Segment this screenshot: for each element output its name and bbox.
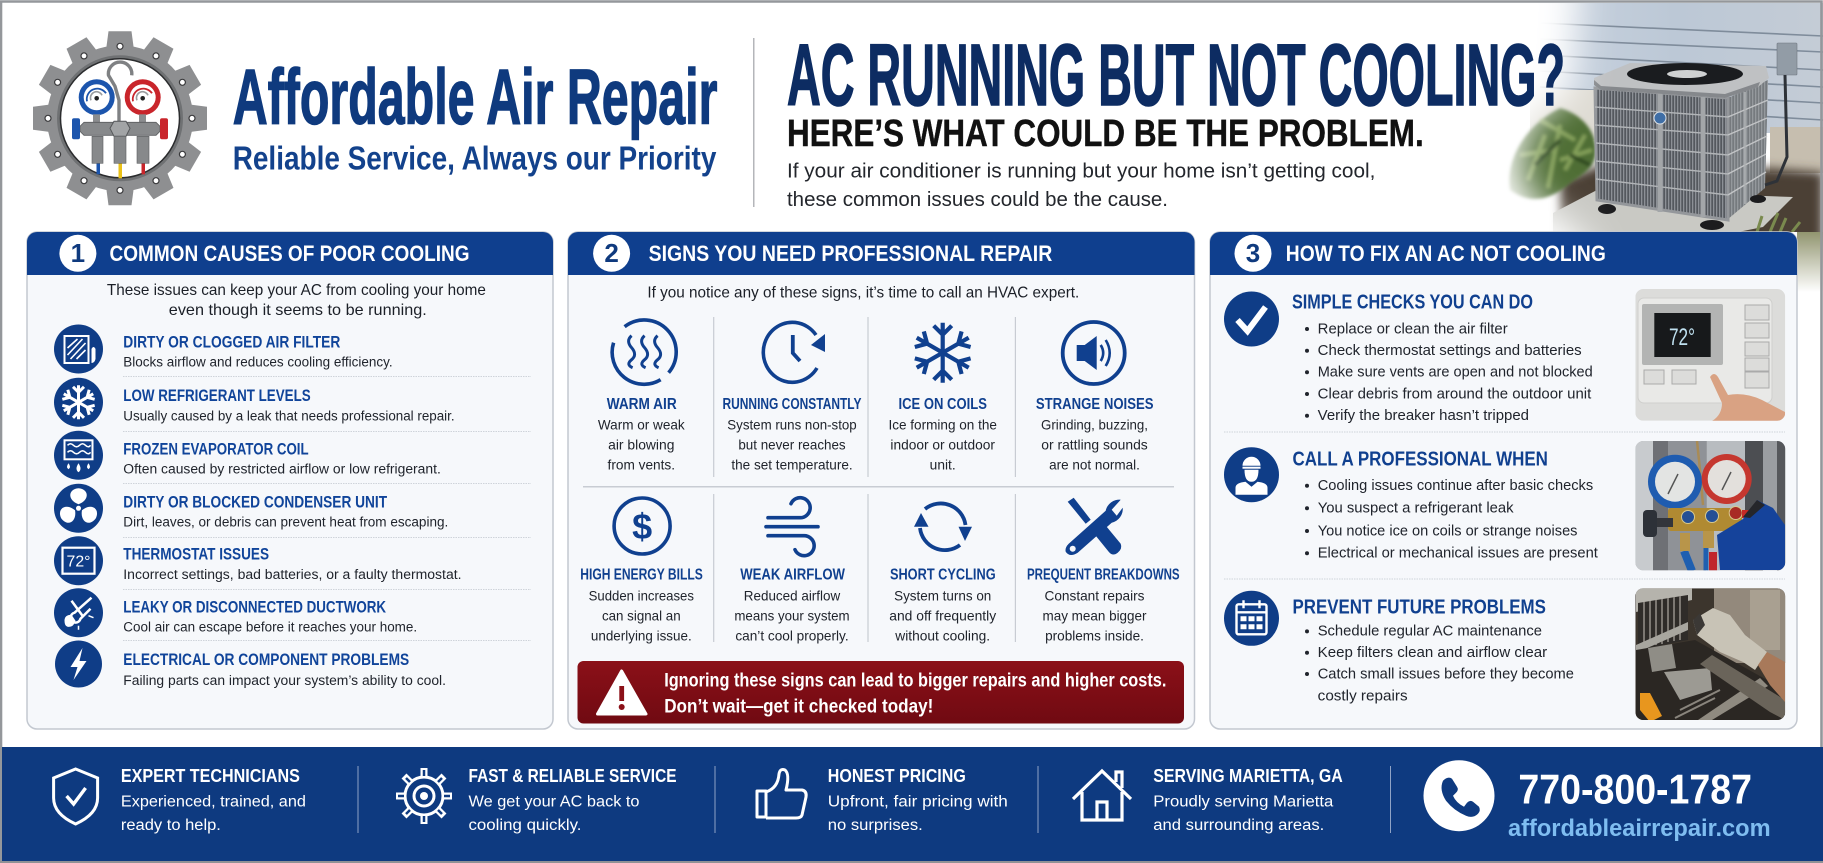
section: simple checks: Clear debris from around the outdoor unit xyxy=(1318,386,1591,402)
manifold xyxy=(72,114,168,178)
icon: shield xyxy=(54,769,98,824)
row: refrigerant: Usually caused by a leak that needs professional repair. xyxy=(123,408,455,423)
dividers xyxy=(1224,432,1785,579)
grass xyxy=(1757,213,1800,232)
phone number: 770-800-1787 xyxy=(1518,765,1752,812)
sign: weak airflow: Reduced airflow xyxy=(744,588,840,603)
dividers xyxy=(123,376,531,640)
callout: warning: Don’t wait—get it checked today! xyxy=(664,696,933,717)
sign: warm air: air blowing xyxy=(608,437,674,452)
icon: lightning bolt xyxy=(55,640,102,688)
icon: snowflake xyxy=(912,323,973,383)
sign: frequent breakdowns: Constant repairs xyxy=(1044,588,1145,603)
icon: leaky duct xyxy=(54,588,103,637)
row: electrical: ELECTRICAL OR COMPONENT PROBLEMS xyxy=(123,651,409,669)
icon: dirty filter xyxy=(54,324,103,374)
unit feet xyxy=(1598,195,1766,230)
icon: calendar xyxy=(1224,591,1279,646)
unit lid xyxy=(1594,63,1769,98)
gear xyxy=(33,31,207,205)
icon: dollar xyxy=(614,498,670,554)
sign: short cycling: and off frequently xyxy=(889,608,996,623)
sign: frequent breakdowns: problems inside. xyxy=(1045,628,1144,643)
icon: gear xyxy=(396,768,452,824)
intro xyxy=(107,282,486,319)
row: ductwork: Cool air can escape before it reaches your home. xyxy=(123,620,417,635)
icon: phone xyxy=(1424,760,1494,831)
heading: HOW TO FIX AN AC NOT COOLING xyxy=(1286,241,1606,266)
icon: thermostat xyxy=(54,536,103,585)
sign: short cycling: without cooling. xyxy=(894,628,990,643)
sign: frequent breakdowns: PREQUENT BREAKDOWNS xyxy=(1027,566,1180,583)
website: affordableairrepair.com xyxy=(1508,815,1771,842)
grid lines xyxy=(714,317,1015,642)
icon: house xyxy=(1073,771,1131,820)
sign: high energy bills: Sudden increases xyxy=(589,588,694,603)
sign: short cycling: System turns on xyxy=(894,588,991,603)
footer xyxy=(0,747,1823,863)
item: honest pricing: Upfront, fair pricing with xyxy=(828,794,1008,810)
item: fast service: FAST & RELIABLE SERVICE xyxy=(468,766,676,786)
sign: high energy bills: underlying issue. xyxy=(591,628,692,643)
item: expert technicians xyxy=(121,766,306,834)
row: electrical: Failing parts can impact your system’s ability to cool. xyxy=(123,673,446,688)
item: fast service: We get your AC back to xyxy=(468,794,640,810)
divider xyxy=(753,38,754,207)
panel: signs xyxy=(568,232,1194,729)
sign: ice on coils: Ice forming on the xyxy=(888,418,997,433)
row: refrigerant: LOW REFRIGERANT LEVELS xyxy=(123,387,311,405)
section: simple checks: Check thermostat settings and batteries xyxy=(1318,343,1582,359)
icon: check xyxy=(1224,292,1279,346)
item: expert technicians: Experienced, trained, and xyxy=(121,794,306,810)
logo xyxy=(33,31,717,205)
photo: thermostat xyxy=(1635,289,1785,421)
sign: ice on coils: indoor or outdoor xyxy=(890,437,995,452)
sign: weak airflow xyxy=(734,566,850,643)
sign: strange noises: STRANGE NOISES xyxy=(1036,396,1154,413)
hook xyxy=(108,62,132,121)
headline: these common issues could be the cause. xyxy=(787,188,1168,211)
row: dirty filter: Blocks airflow and reduces cooling efficiency. xyxy=(123,354,393,369)
panel: common causes xyxy=(27,232,553,729)
gauge: blue xyxy=(79,79,115,115)
sign: warm air: WARM AIR xyxy=(607,396,677,413)
panel: how to fix: 3 xyxy=(1246,238,1260,268)
item: honest pricing: no surprises. xyxy=(828,817,923,834)
section: prevent future problems: Schedule regular AC maintenance xyxy=(1318,624,1542,640)
section: call a professional: Electrical or mechanical issues are present xyxy=(1318,546,1598,562)
section: prevent future problems xyxy=(1292,596,1574,705)
unit right face xyxy=(1728,80,1768,219)
row: condenser: DIRTY OR BLOCKED CONDENSER UNIT xyxy=(123,493,387,511)
row: thermostat: Incorrect settings, bad batteries, or a faulty thermostat. xyxy=(123,567,462,582)
sign: high energy bills xyxy=(580,566,703,643)
section: call a professional: Cooling issues continue after basic checks xyxy=(1318,478,1593,494)
tagline: Reliable Service, Always our Priority xyxy=(233,139,717,176)
item: expert technicians: ready to help. xyxy=(121,817,221,834)
section: simple checks xyxy=(1292,290,1593,424)
row: ductwork: LEAKY OR DISCONNECTED DUCTWORK xyxy=(123,598,386,616)
sign: weak airflow: WEAK AIRFLOW xyxy=(740,566,845,583)
sign: warm air: from vents. xyxy=(608,457,675,472)
sign: short cycling: SHORT CYCLING xyxy=(890,566,996,583)
section: simple checks: Make sure vents are open and not blocked xyxy=(1318,365,1593,381)
sign: strange noises: Grinding, buzzing, xyxy=(1041,418,1148,433)
sign: strange noises: or rattling sounds xyxy=(1041,437,1148,452)
heading: SIGNS YOU NEED PROFESSIONAL REPAIR xyxy=(649,241,1052,266)
sign: strange noises: are not normal. xyxy=(1049,457,1140,472)
row: dirty filter xyxy=(123,334,393,369)
section: prevent future problems: costly repairs xyxy=(1318,689,1408,705)
section: prevent future problems: Keep filters clean and airflow clear xyxy=(1318,645,1547,661)
icon: cycle arrows xyxy=(914,503,972,550)
unit front face xyxy=(1595,88,1728,220)
shrub xyxy=(1509,108,1596,199)
item: expert technicians: EXPERT TECHNICIANS xyxy=(121,766,300,786)
row: thermostat: THERMOSTAT ISSUES xyxy=(123,546,269,564)
row: evaporator: Often caused by restricted airflow or low refrigerant. xyxy=(123,462,441,477)
section: simple checks: Verify the breaker hasn’t tripped xyxy=(1318,408,1529,424)
sign: running constantly: but never reaches xyxy=(738,437,846,452)
row: condenser: Dirt, leaves, or debris can prevent heat from escaping. xyxy=(123,514,448,529)
icon: clock with arrow xyxy=(763,322,825,382)
white fade xyxy=(1400,0,1592,300)
row: dirty filter: DIRTY OR CLOGGED AIR FILTER xyxy=(123,334,340,352)
heading: COMMON CAUSES OF POOR COOLING xyxy=(110,241,470,266)
sign: strange noises xyxy=(1036,396,1154,472)
sign: warm air: Warm or weak xyxy=(598,418,685,433)
item: fast service xyxy=(468,766,676,834)
row: evaporator xyxy=(123,440,441,477)
item: honest pricing xyxy=(828,766,1008,834)
sign: running constantly: RUNNING CONSTANTLY xyxy=(722,396,862,413)
row: evaporator: FROZEN EVAPORATOR COIL xyxy=(123,440,309,458)
icon: thumbs up xyxy=(757,770,806,818)
icon: frozen coil xyxy=(54,431,103,480)
callout: warning: Ignoring these signs can lead to bigger repairs and higher costs. xyxy=(664,671,1166,692)
photo: manifold gauges xyxy=(1635,441,1786,571)
icon: speaker xyxy=(1063,322,1125,384)
sign: high energy bills: HIGH ENERGY BILLS xyxy=(580,566,703,583)
row: thermostat xyxy=(123,546,462,582)
icon: dollar: $ xyxy=(632,506,652,547)
row: ductwork xyxy=(123,598,417,635)
section: call a professional xyxy=(1292,448,1598,562)
intro text: If your air conditioner is running but your home isn’t getting cool, xyxy=(787,160,1375,183)
sign: frequent breakdowns: may mean bigger xyxy=(1042,608,1147,623)
icon: wind xyxy=(766,498,818,556)
section: prevent future problems: Catch small issues before they become xyxy=(1318,666,1574,682)
sign: running constantly: System runs non-stop xyxy=(727,418,857,433)
row: refrigerant xyxy=(123,387,455,423)
item: fast service: cooling quickly. xyxy=(468,817,582,834)
icon: fan xyxy=(54,484,103,533)
icon: tools xyxy=(1066,498,1123,555)
icon: technician xyxy=(1224,447,1279,502)
section: simple checks: SIMPLE CHECKS YOU CAN DO xyxy=(1292,290,1533,313)
row: electrical xyxy=(123,651,446,688)
contact xyxy=(1424,760,1771,842)
callout: warning xyxy=(578,661,1184,724)
sign: high energy bills: can signal an xyxy=(602,608,681,623)
AC unit photo xyxy=(1400,0,1823,300)
icon: snowflake xyxy=(54,378,103,427)
section: simple checks: Replace or clean the air filter xyxy=(1318,321,1508,337)
headline xyxy=(787,27,1565,211)
sign: running constantly: the set temperature. xyxy=(731,457,853,472)
company name: Affordable Air Repair xyxy=(233,52,717,140)
icon: warning triangle xyxy=(598,671,646,714)
sign: short cycling xyxy=(889,566,996,643)
intro: If you notice any of these signs, it’s time to call an HVAC expert. xyxy=(647,284,1079,301)
sign: frequent breakdowns xyxy=(1027,566,1180,643)
siding xyxy=(1530,3,1823,133)
gauge: red xyxy=(125,79,161,115)
panel: signs: 2 xyxy=(604,238,619,268)
electrical box xyxy=(1777,43,1797,75)
sign: ice on coils: unit. xyxy=(930,457,956,472)
panel: how to fix xyxy=(1210,232,1797,729)
panel: common causes: 1 xyxy=(71,238,85,268)
subtitle: HERE’S WHAT COULD BE THE PROBLEM. xyxy=(787,113,1424,155)
photo: technician servicing unit xyxy=(1635,588,1786,722)
sign: weak airflow: can’t cool properly. xyxy=(735,628,849,643)
item: serving marietta: SERVING MARIETTA, GA xyxy=(1153,766,1343,786)
sign: running constantly xyxy=(722,396,862,472)
icon: warm air xyxy=(612,320,676,384)
item: serving marietta xyxy=(1153,766,1343,834)
sign: ice on coils: ICE ON COILS xyxy=(898,396,987,413)
section: call a professional: You suspect a refrigerant leak xyxy=(1318,501,1514,517)
intro: even though it seems to be running. xyxy=(169,302,427,319)
item: honest pricing: HONEST PRICING xyxy=(828,766,966,786)
sign: warm air xyxy=(598,396,685,472)
sign: ice on coils xyxy=(888,396,997,472)
item: serving marietta: Proudly serving Marietta xyxy=(1153,794,1334,810)
intro: These issues can keep your AC from cooling your home xyxy=(107,282,486,299)
icon: thermostat: 72° xyxy=(66,554,90,571)
row: condenser xyxy=(123,493,448,529)
section: prevent future problems: PREVENT FUTURE PROBLEMS xyxy=(1292,596,1546,619)
section: call a professional: You notice ice on coils or strange noises xyxy=(1318,523,1578,539)
sign: weak airflow: means your system xyxy=(734,608,850,623)
photo: thermostat: 72° xyxy=(1669,324,1695,351)
item: serving marietta: and surrounding areas. xyxy=(1153,817,1324,834)
section: call a professional: CALL A PROFESSIONAL WHEN xyxy=(1292,448,1548,471)
